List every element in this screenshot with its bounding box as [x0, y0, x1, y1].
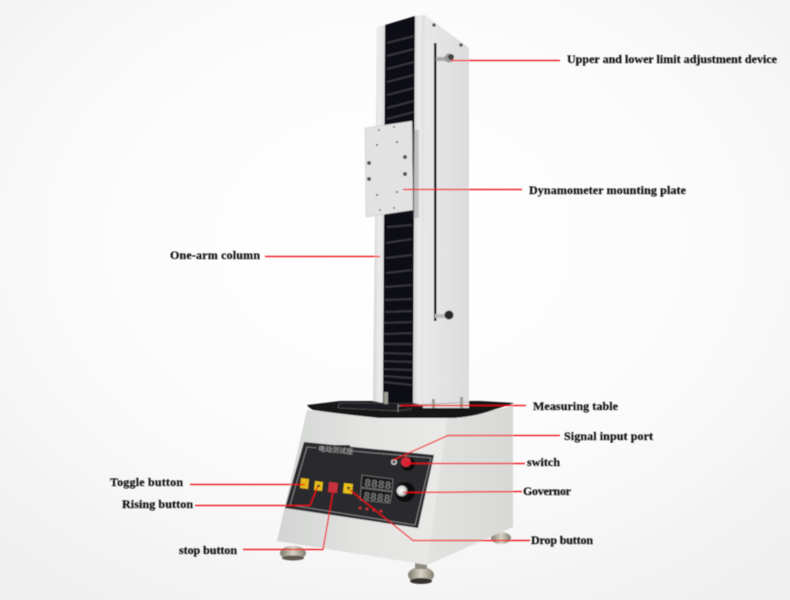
column screws: [432, 23, 436, 27]
display: 8888: [364, 478, 392, 493]
line: governor: [403, 492, 522, 493]
governor knob: [395, 482, 415, 502]
rack channel: [383, 16, 415, 403]
label: table: Measuring table: [533, 399, 619, 413]
stop button: [328, 482, 338, 493]
display: [360, 475, 393, 506]
signal input port: [391, 459, 397, 465]
feet: [280, 532, 511, 584]
label: switch: switch: [527, 455, 560, 469]
label: mounting plate: Dynamometer mounting plate: [529, 183, 687, 197]
control panel: [285, 442, 434, 528]
dynamometer mounting plate: [365, 121, 413, 217]
line: rising button: [195, 486, 318, 506]
label: drop button: Drop button: [531, 533, 593, 547]
switch: [401, 457, 415, 471]
line: signal port: [393, 436, 560, 460]
rising button: [314, 481, 323, 491]
column left strip: [373, 25, 385, 403]
display: 8888: [363, 491, 391, 506]
upper limit knob: [436, 54, 454, 62]
column slot: [434, 43, 436, 321]
line: mounting plate: [403, 188, 522, 190]
column right side: [423, 15, 469, 408]
control panel: 电动测试座: [318, 444, 353, 456]
lower limit knob: [435, 310, 454, 320]
label: stop button: stop button: [179, 543, 237, 557]
table front lip: [410, 406, 493, 418]
leader lines: [190, 60, 560, 550]
line: toggle button: [190, 484, 305, 486]
indicator lights: [359, 507, 382, 512]
label: signal port: Signal input port: [564, 429, 653, 443]
line: table: [400, 404, 526, 406]
label: column: One-arm column: [170, 248, 260, 262]
plate shadow: [413, 130, 419, 218]
label: toggle button: Toggle button: [110, 475, 183, 489]
table fixing plate: [398, 402, 469, 412]
line: upper limit: [451, 60, 560, 62]
table top: [307, 401, 514, 418]
line: drop button: [350, 490, 530, 540]
line: switch: [405, 462, 525, 464]
base cabinet: [277, 406, 513, 565]
line: column: [265, 256, 380, 258]
label: governor: Governor: [523, 484, 572, 498]
label: rising button: Rising button: [122, 497, 193, 511]
toggle button: [300, 478, 309, 489]
label: upper limit: Upper and lower limit adjustment device: [567, 52, 778, 66]
drop button: [343, 483, 353, 494]
panel title: [316, 445, 350, 451]
table bolts: [384, 392, 463, 410]
column front strip: [413, 15, 425, 405]
line: stop button: [243, 492, 333, 550]
one-arm column: [373, 15, 493, 418]
